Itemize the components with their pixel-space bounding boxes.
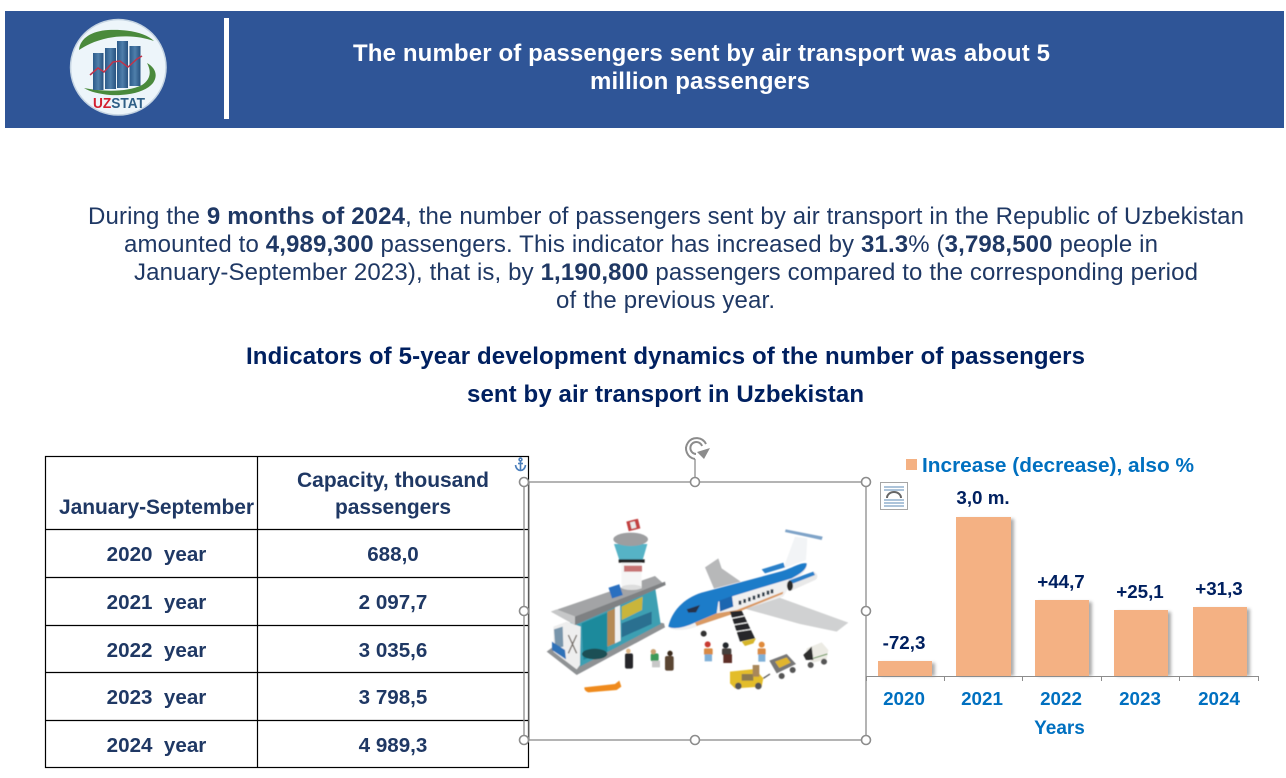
table header: passengers (335, 496, 451, 519)
logo: UZSTAT (70, 19, 167, 116)
header divider (224, 18, 229, 119)
table rows: 3 798,5 (359, 686, 427, 709)
bar chart (866, 454, 1259, 739)
header title: million passengers (590, 68, 810, 95)
table header: January-September (59, 496, 254, 519)
logo: UZSTAT: UZSTAT (93, 95, 145, 112)
airplane (668, 529, 848, 646)
x axis labels: 2020 (883, 688, 925, 709)
data labels: +31,3 (1195, 578, 1243, 599)
data labels: 3,0 m. (956, 487, 1010, 508)
section heading (246, 343, 1085, 408)
table rows: 4 989,3 (359, 734, 427, 757)
x axis labels (883, 688, 1240, 709)
chart legend: Increase (decrease), also % (922, 454, 1194, 477)
data labels (883, 487, 1243, 653)
intro paragraph: amounted to 4,989,300 passengers. This indicator has increased by 31.3% (3,798,500 people in (124, 231, 1158, 258)
data labels: +25,1 (1116, 581, 1164, 602)
header title (353, 40, 1050, 95)
illustration: airport and airplane (547, 519, 848, 692)
data labels: +44,7 (1037, 571, 1085, 592)
table rows (107, 543, 427, 757)
orange boat (584, 681, 621, 692)
table rows: 2020 year (107, 543, 206, 566)
table header (59, 469, 489, 519)
table rows: 2024 year (107, 734, 206, 757)
image selection frame (520, 459, 870, 744)
intro paragraph: of the previous year. (556, 287, 775, 314)
intro paragraph: During the 9 months of 2024, the number of passengers sent by air transport in the Republic of Uzbekistan (88, 203, 1244, 230)
x axis labels: 2024 (1198, 688, 1240, 709)
terminal building (547, 519, 666, 675)
header banner (5, 11, 1284, 128)
x axis labels: 2023 (1119, 688, 1161, 709)
table rows: 2022 year (107, 639, 206, 662)
table rows: 2 097,7 (359, 591, 427, 614)
bars (878, 517, 1250, 676)
x axis labels: 2021 (961, 688, 1003, 709)
intro paragraph: January-September 2023), that is, by 1,190,800 passengers compared to the corresponding period (134, 259, 1198, 286)
section heading: Indicators of 5-year development dynamics of the number of passengers (246, 343, 1085, 370)
table header: Capacity, thousand (297, 469, 489, 492)
table rows: 3 035,6 (359, 639, 427, 662)
data table (45, 456, 529, 768)
x axis title: Years (1034, 718, 1085, 739)
data labels: -72,3 (883, 632, 925, 653)
header title: The number of passengers sent by air transport was about 5 (353, 40, 1050, 67)
intro paragraph (88, 203, 1244, 314)
x axis (866, 676, 1259, 681)
section heading: sent by air transport in Uzbekistan (467, 381, 864, 408)
table rows: 688,0 (367, 543, 419, 566)
icon: layout options (880, 482, 908, 510)
minifigures (625, 641, 766, 671)
icon: anchor (516, 458, 526, 470)
x axis labels: 2022 (1040, 688, 1082, 709)
baggage vehicles (730, 642, 828, 689)
table rows: 2023 year (107, 686, 206, 709)
table rows: 2021 year (107, 591, 206, 614)
icon: rotate handle (686, 438, 710, 459)
